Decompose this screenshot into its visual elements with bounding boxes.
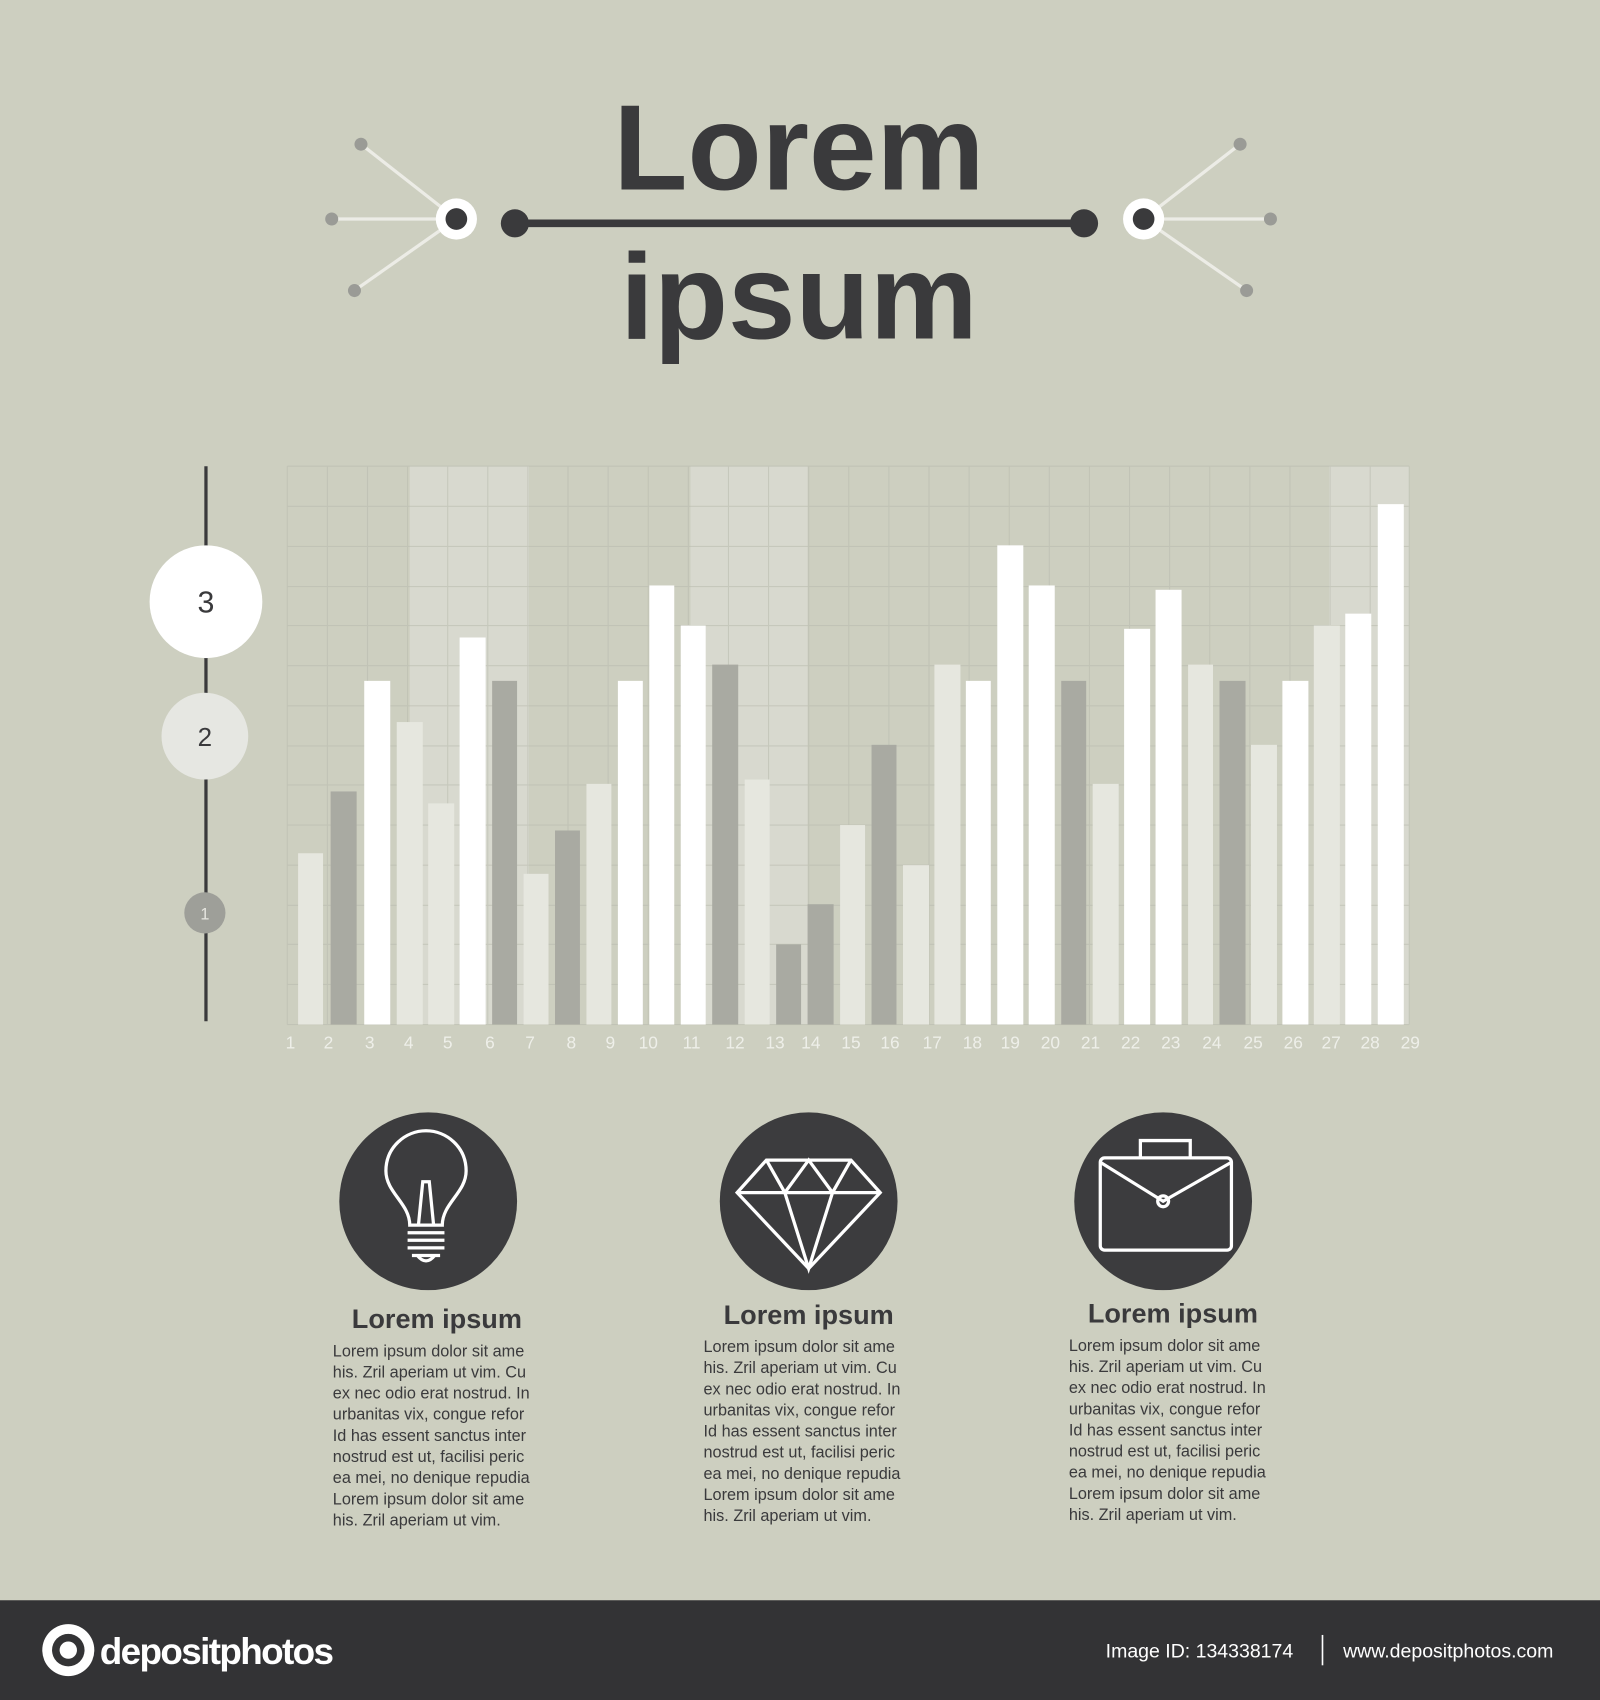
x-axis labels: 11 — [683, 1032, 701, 1052]
text block: column 1: his. Zril aperiam ut vim. Cu — [333, 1363, 526, 1381]
level axis — [150, 466, 262, 1021]
x-axis labels: 24 — [1202, 1032, 1222, 1052]
x-axis labels: 9 — [605, 1032, 615, 1052]
x-axis labels: 3 — [365, 1032, 374, 1052]
text block: column 1: Lorem ipsum dolor sit ame — [333, 1490, 524, 1508]
x-axis labels: 7 — [525, 1032, 535, 1052]
icon: briefcase — [1074, 1112, 1252, 1290]
text block: column 2: his. Zril aperiam ut vim. Cu — [704, 1359, 897, 1377]
x-axis labels — [286, 1032, 1420, 1052]
x-axis labels: 22 — [1121, 1032, 1140, 1052]
x-axis labels: 8 — [566, 1032, 576, 1052]
footer bar: www.depositphotos.com — [1342, 1641, 1553, 1663]
x-axis labels: 25 — [1243, 1032, 1263, 1052]
x-axis labels: 12 — [725, 1032, 745, 1052]
x-axis labels: 19 — [1001, 1032, 1020, 1052]
text block: column 1: his. Zril aperiam ut vim. — [333, 1511, 501, 1529]
x-axis labels: 5 — [443, 1032, 453, 1052]
text block: column 3: urbanitas vix, congue refor — [1069, 1400, 1261, 1418]
text block: column 2: his. Zril aperiam ut vim. — [704, 1507, 871, 1525]
text block: column 2: ea mei, no denique repudia — [704, 1465, 901, 1483]
text block: column 1: nostrud est ut, facilisi peric — [333, 1448, 524, 1466]
icon: light bulb — [339, 1112, 517, 1290]
text block: column 3: Lorem ipsum — [1088, 1298, 1258, 1329]
text block: column 1 — [333, 1303, 531, 1529]
x-axis labels: 14 — [801, 1032, 821, 1052]
text block: column 2: Id has essent sanctus inter — [704, 1423, 897, 1441]
title decoration: connector line — [501, 209, 1098, 237]
title — [613, 80, 984, 364]
bar chart — [287, 466, 1409, 1025]
text block: column 1: urbanitas vix, congue refor — [333, 1406, 525, 1424]
level axis: 3 — [198, 587, 214, 620]
text block: column 1: Id has essent sanctus inter — [333, 1427, 527, 1445]
text block: column 3: Lorem ipsum dolor sit ame — [1069, 1485, 1260, 1503]
text block: column 1: ex nec odio erat nostrud. In — [333, 1385, 530, 1403]
x-axis labels: 2 — [324, 1032, 333, 1052]
text block: column 3: Id has essent sanctus inter — [1069, 1421, 1263, 1439]
icon: diamond — [720, 1112, 898, 1290]
text block: column 2: Lorem ipsum dolor sit ame — [704, 1486, 895, 1504]
x-axis labels: 18 — [963, 1032, 982, 1052]
x-axis labels: 4 — [404, 1032, 414, 1052]
text block: column 2: ex nec odio erat nostrud. In — [704, 1380, 900, 1398]
x-axis labels: 10 — [639, 1032, 658, 1052]
x-axis labels: 6 — [485, 1032, 495, 1052]
x-axis labels: 16 — [880, 1032, 900, 1052]
text block: column 3 — [1069, 1298, 1267, 1524]
text block: column 2 — [704, 1299, 901, 1525]
title decoration: left node — [325, 138, 477, 297]
x-axis labels: 1 — [286, 1032, 295, 1052]
text block: column 1: Lorem ipsum dolor sit ame — [333, 1342, 524, 1360]
x-axis labels: 17 — [923, 1032, 942, 1052]
text block: column 2: Lorem ipsum — [724, 1299, 894, 1330]
text block: column 2: nostrud est ut, facilisi peric — [704, 1444, 895, 1462]
x-axis labels: 27 — [1322, 1032, 1341, 1052]
x-axis labels: 20 — [1041, 1032, 1060, 1052]
x-axis labels: 15 — [841, 1032, 861, 1052]
footer bar: depositphotos — [100, 1631, 332, 1672]
text block: column 2: urbanitas vix, congue refor — [704, 1401, 896, 1419]
text block: column 3: his. Zril aperiam ut vim. Cu — [1069, 1358, 1262, 1376]
title: Lorem — [613, 80, 984, 216]
text block: column 1: ea mei, no denique repudia — [333, 1469, 531, 1487]
x-axis labels: 23 — [1161, 1032, 1180, 1052]
x-axis labels: 29 — [1401, 1032, 1420, 1052]
x-axis labels: 21 — [1081, 1032, 1100, 1052]
text block: column 1: Lorem ipsum — [352, 1303, 522, 1334]
text block: column 2: Lorem ipsum dolor sit ame — [704, 1338, 895, 1356]
x-axis labels: 26 — [1284, 1032, 1303, 1052]
footer bar — [0, 1600, 1600, 1700]
level axis: 1 — [200, 905, 209, 923]
footer bar: Image ID: 134338174 — [1106, 1641, 1293, 1663]
x-axis labels: 13 — [765, 1032, 785, 1052]
text block: column 3: his. Zril aperiam ut vim. — [1069, 1506, 1237, 1524]
level axis: 2 — [198, 722, 212, 752]
text block: column 3: ex nec odio erat nostrud. In — [1069, 1379, 1266, 1397]
text block: column 3: ea mei, no denique repudia — [1069, 1464, 1267, 1482]
text block: column 3: Lorem ipsum dolor sit ame — [1069, 1337, 1260, 1355]
title decoration: right node — [1123, 138, 1277, 297]
text block: column 3: nostrud est ut, facilisi peric — [1069, 1443, 1260, 1461]
x-axis labels: 28 — [1361, 1032, 1380, 1052]
title: ipsum — [620, 228, 978, 364]
